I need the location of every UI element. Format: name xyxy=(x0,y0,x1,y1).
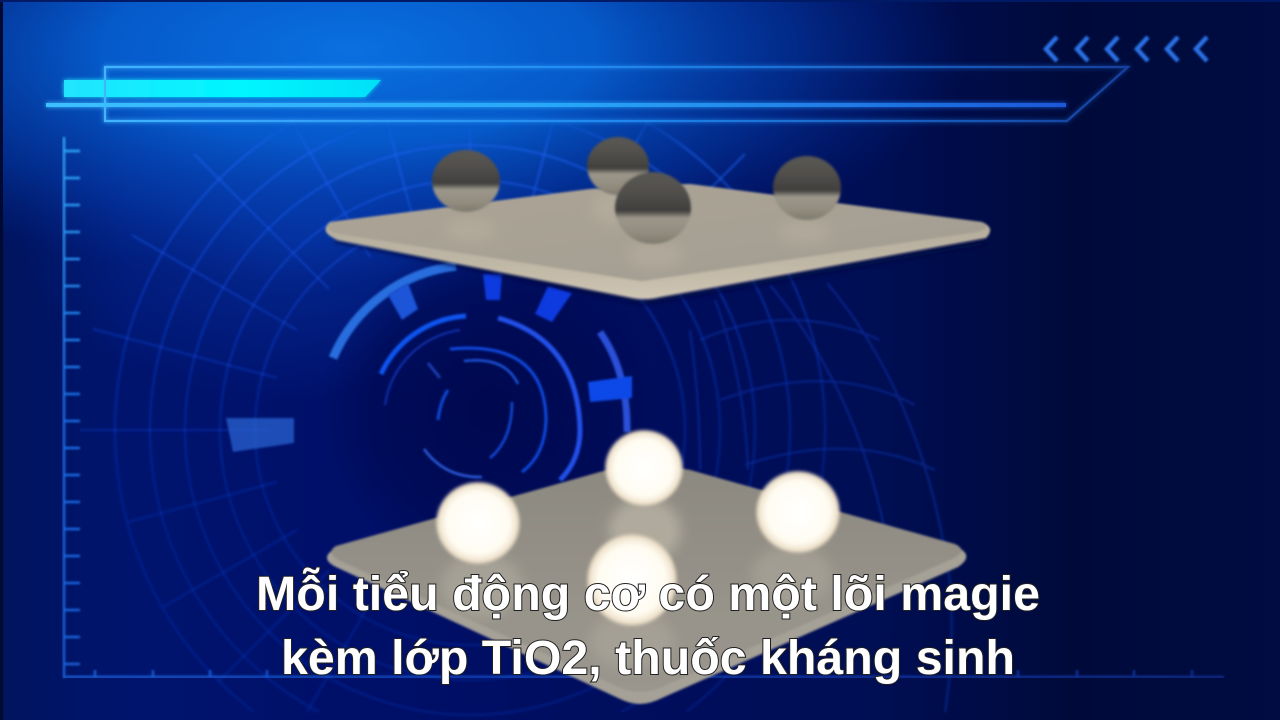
middle arcs xyxy=(381,316,466,374)
outline xyxy=(105,67,1128,121)
sphere front xyxy=(587,534,677,626)
dark hub behind the rings xyxy=(300,230,680,590)
sphere front xyxy=(615,172,691,244)
header frame xyxy=(46,67,1128,121)
chevrons xyxy=(1046,37,1207,61)
plate top xyxy=(327,184,986,281)
subtitle xyxy=(256,567,1040,685)
white spheres xyxy=(436,430,840,626)
upper plate xyxy=(326,184,990,303)
plate shadow xyxy=(335,240,985,303)
sphere right xyxy=(773,156,841,220)
sphere left xyxy=(436,482,520,564)
subtitle line 2: kèm lớp TiO2, thuốc kháng sinh xyxy=(281,632,1015,685)
plate edge xyxy=(326,184,990,299)
radial grid: right sphere xyxy=(690,283,952,712)
dark spheres xyxy=(432,137,841,244)
circular HUD rings xyxy=(333,266,627,480)
inner arcs xyxy=(385,330,460,405)
reflections xyxy=(609,498,681,562)
lower plate xyxy=(327,465,966,704)
sphere left xyxy=(432,150,500,212)
outer arc xyxy=(333,266,456,358)
HUD blocks xyxy=(226,274,632,452)
progress bar xyxy=(64,80,381,97)
radial grid: left sphere xyxy=(80,75,825,715)
mid line xyxy=(46,103,1066,107)
vertical ruler xyxy=(64,137,80,678)
horizontal ruler xyxy=(64,670,1224,677)
sphere right xyxy=(756,471,840,553)
plate body xyxy=(327,465,966,704)
reflections xyxy=(444,190,831,269)
sphere back xyxy=(605,430,683,506)
subtitle line 1: Mỗi tiểu động cơ có một lõi magie xyxy=(256,567,1040,621)
sphere back xyxy=(587,137,649,195)
